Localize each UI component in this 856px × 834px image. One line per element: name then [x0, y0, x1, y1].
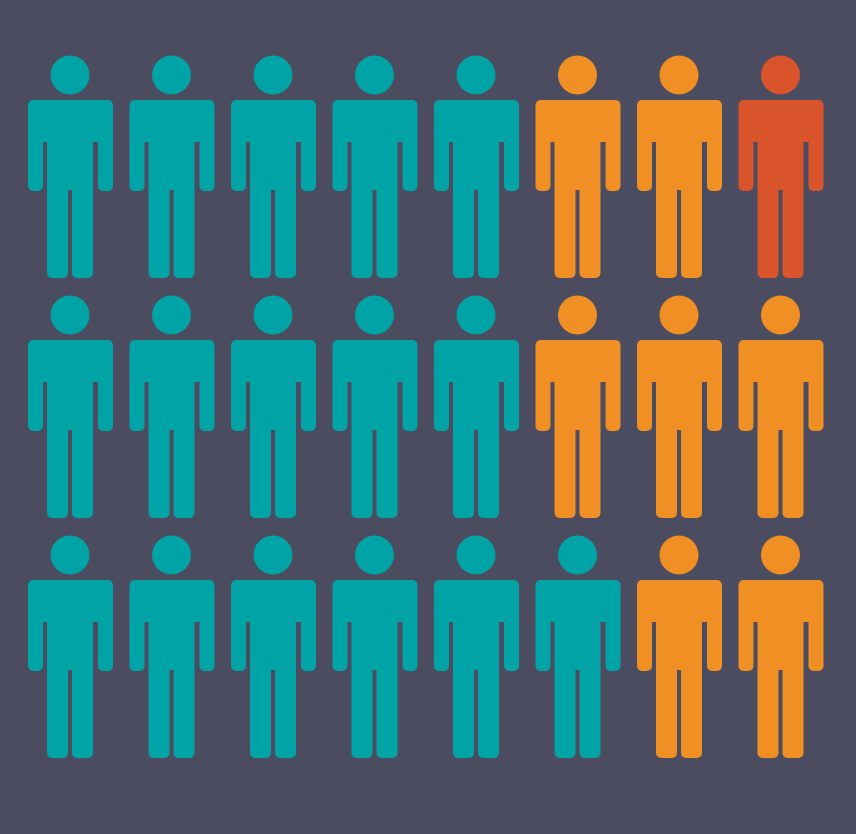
row 1 — [28, 56, 824, 278]
row 3 — [28, 536, 824, 758]
row 2 — [28, 296, 824, 518]
